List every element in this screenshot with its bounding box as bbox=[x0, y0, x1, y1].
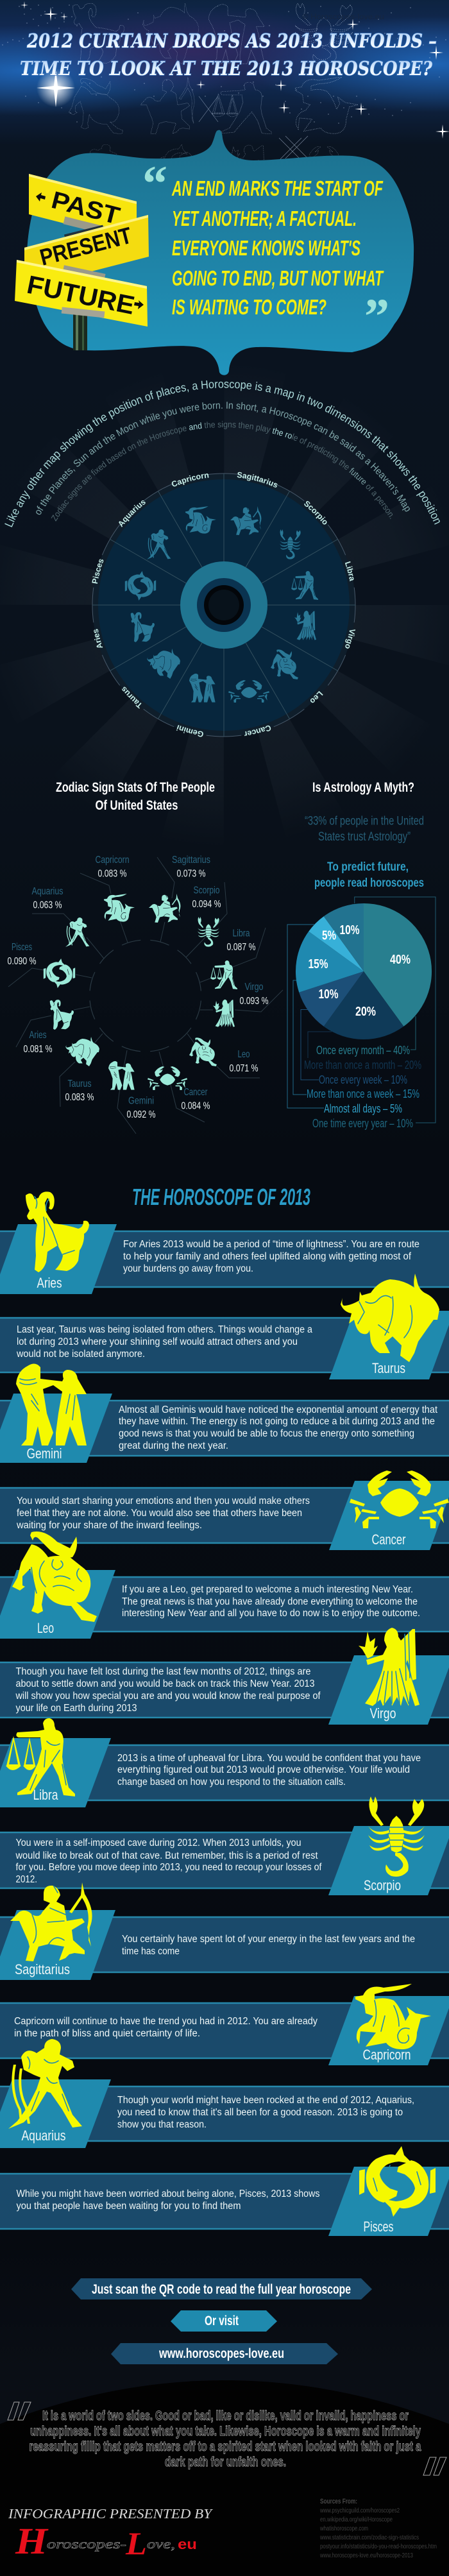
pie labels: 40% bbox=[390, 953, 411, 967]
stats labels: Gemini bbox=[128, 1096, 154, 1106]
stats labels bbox=[8, 855, 268, 1120]
icon: cancer bbox=[350, 1471, 449, 1528]
wheel sign labels: Virgo bbox=[345, 629, 355, 649]
banner: scan QR code bbox=[71, 2278, 372, 2299]
connector lines bbox=[287, 897, 436, 1123]
text: aries bbox=[123, 1239, 419, 1274]
pie labels bbox=[308, 923, 411, 1019]
text: virgo: about to settle down and you would be back on track this New Year. 2013 bbox=[15, 1678, 314, 1689]
heading: zodiac sign stats: Zodiac Sign Stats Of The People bbox=[56, 780, 215, 795]
text: virgo: your life on Earth during 2013 bbox=[15, 1703, 137, 1714]
panel: sagittarius bbox=[0, 1882, 449, 1980]
label: aries: Aries bbox=[37, 1275, 62, 1291]
panel: aquarius bbox=[0, 2039, 449, 2148]
wheel sign labels: Gemini bbox=[176, 725, 203, 737]
sources list bbox=[319, 2498, 437, 2559]
credit: infographic presented by: INFOGRAPHIC PRESENTED BY bbox=[8, 2506, 214, 2521]
wheel sign labels: Taurus bbox=[122, 687, 141, 709]
chart: pie bbox=[287, 897, 436, 1123]
banner: scan QR code: Just scan the QR code to read the full year horoscope bbox=[92, 2282, 351, 2297]
text: aries: your burdens go away from you. bbox=[123, 1263, 253, 1274]
text: libra bbox=[117, 1753, 421, 1787]
text: gemini: they have within. The energy is not going to reduce a bit during 2013 and the bbox=[119, 1416, 435, 1427]
text: aquarius: Though your world might have been rocked at the end of 2012, Aquarius, bbox=[117, 2095, 414, 2106]
label: pisces: Pisces bbox=[363, 2219, 394, 2235]
stats labels: 0.087 % bbox=[227, 942, 255, 953]
stats labels: Aries bbox=[30, 1030, 46, 1041]
text: scorpio: would like to break out of that cave. But remember, this is a period of rest bbox=[15, 1850, 318, 1861]
background rays around wheel bbox=[102, 483, 346, 727]
stats labels: 0.063 % bbox=[33, 900, 62, 911]
text: virgo: will show you how special you are and you would know the real purpose of bbox=[15, 1691, 321, 1702]
panel: scorpio bbox=[0, 1796, 449, 1895]
text: leo: interesting New Year and all you have to do now is to enjoy the outcome. bbox=[122, 1608, 420, 1619]
stats labels: 0.073 % bbox=[177, 869, 205, 879]
quote: 33 percent bbox=[305, 815, 424, 844]
subheading: to predict future bbox=[314, 860, 424, 890]
pie legend: Almost all days – 5% bbox=[324, 1102, 402, 1115]
text: cancer: waiting for your share of the inward feelings. bbox=[16, 1520, 202, 1531]
stats labels: Taurus bbox=[68, 1079, 91, 1089]
icon: taurus bbox=[341, 1274, 439, 1362]
quote marks: opening: “ bbox=[142, 155, 167, 211]
stats labels: Sagittarius bbox=[172, 855, 210, 866]
text: taurus: Last year, Taurus was being isolated from others. Things would change a bbox=[17, 1324, 312, 1335]
label: taurus: Taurus bbox=[372, 1360, 405, 1376]
text: leo bbox=[122, 1584, 420, 1619]
sources list: www.psychicguild.com/horoscopes2 bbox=[319, 2507, 400, 2514]
sources list: en.wikipedia.org/wiki/Horoscope bbox=[320, 2516, 393, 2523]
text: pisces: While you might have been worried about being alone, Pisces, 2013 shows bbox=[17, 2188, 320, 2199]
sources list: www.horoscopes-love.eu/horoscope-2013 bbox=[319, 2552, 413, 2559]
icon: past present future signpost bbox=[15, 174, 149, 350]
quote text bbox=[171, 176, 384, 319]
wheel zodiac icons bbox=[125, 506, 318, 703]
text: libra: everything figured out but 2013 would prove otherwise. Your life would bbox=[117, 1764, 410, 1775]
stats labels: 0.094 % bbox=[192, 899, 221, 910]
banner: website bbox=[111, 2343, 338, 2364]
panel: gemini bbox=[0, 1363, 449, 1463]
wheel sign labels: Leo bbox=[310, 691, 323, 703]
text: aquarius: show you that reason. bbox=[117, 2119, 207, 2130]
stats labels: Scorpio bbox=[194, 885, 220, 896]
text: scorpio: for you. Before you move deep into 2013, you need to recoup your losses of bbox=[15, 1862, 322, 1873]
text: pisces: you that people have been waiting for you to find them bbox=[17, 2201, 241, 2212]
stats labels: 0.071 % bbox=[230, 1063, 258, 1074]
icon: scorpio bbox=[368, 1796, 425, 1877]
stats labels: Capricorn bbox=[95, 855, 130, 866]
text: taurus: lot during 2013 where your shining self would attract others and you bbox=[17, 1336, 298, 1347]
panel: libra bbox=[0, 1718, 449, 1807]
heading: zodiac sign stats bbox=[56, 780, 215, 813]
panel: capricorn bbox=[0, 1984, 449, 2065]
text: capricorn bbox=[14, 2016, 318, 2039]
banner: or visit: Or visit bbox=[205, 2314, 239, 2328]
icon: aquarius bbox=[8, 2039, 82, 2129]
stats labels: Cancer bbox=[183, 1087, 208, 1098]
icon: past present future signpost: FUTURE bbox=[24, 271, 137, 320]
sources list: www.statisticbrain.com/zodiac-sign-statistics bbox=[319, 2534, 419, 2541]
text: scorpio: You were in a self-imposed cave during 2012. When 2013 unfolds, you bbox=[15, 1838, 301, 1848]
pie legend: Once every month – 40% bbox=[316, 1044, 410, 1057]
wheel hub bbox=[180, 561, 267, 649]
text: sagittarius bbox=[122, 1934, 415, 1957]
text: sagittarius: time has come bbox=[122, 1946, 180, 1957]
icon: sagittarius bbox=[10, 1882, 92, 1961]
icon: gemini bbox=[16, 1363, 87, 1446]
heading: is astrology a myth: Is Astrology A Myth? bbox=[312, 780, 414, 795]
text: sagittarius: You certainly have spent lot of your energy in the last few years and the bbox=[122, 1934, 415, 1945]
text: leo: If you are a Leo, get prepared to welcome a much interesting New Year. bbox=[122, 1584, 413, 1595]
label: cancer: Cancer bbox=[372, 1531, 405, 1548]
stats labels: 0.083 % bbox=[97, 869, 127, 879]
curved intro paragraph: of the Planets, Sun and the Moon while you were born. In short, a Horoscope can be said as a Heaven's Map bbox=[36, 402, 410, 515]
constellation figures bbox=[69, 3, 358, 183]
panel: leo bbox=[0, 1531, 449, 1639]
panel: cancer bbox=[0, 1471, 449, 1550]
quote marks: closing: ” bbox=[364, 288, 389, 344]
stats labels: 0.090 % bbox=[8, 956, 36, 967]
icon: pisces bbox=[359, 2146, 436, 2217]
text: aries: to help your family and others feel uplifted along with getting most of bbox=[123, 1251, 412, 1262]
text: taurus bbox=[16, 1324, 312, 1360]
panel: virgo bbox=[0, 1628, 449, 1725]
stats labels: 0.093 % bbox=[240, 996, 268, 1007]
heading: the horoscope of 2013: THE HOROSCOPE OF 2013 bbox=[132, 1184, 310, 1210]
quote: 33 percent: States trust Astrology” bbox=[318, 830, 411, 844]
stats labels: 0.092 % bbox=[127, 1109, 155, 1120]
pie labels: 15% bbox=[308, 957, 328, 971]
curved intro paragraph: Zodiac signs are fixed based on the Horoscope and the signs then play the role of predicting the future of a person. bbox=[51, 421, 393, 521]
pie legend: Once every week – 10% bbox=[319, 1073, 407, 1086]
stats labels: 0.081 % bbox=[23, 1044, 53, 1055]
closing quote marks close bbox=[423, 2457, 446, 2475]
wheel sign labels: Scorpio bbox=[304, 500, 327, 525]
header: starry sky with constellations bbox=[0, 0, 449, 183]
leader lines bbox=[8, 857, 283, 1134]
wheel sign labels: Capricorn bbox=[172, 473, 209, 486]
stats labels: Pisces bbox=[12, 942, 32, 953]
logo: horoscopes-love.eu: oroscopes- bbox=[47, 2538, 126, 2552]
text: pisces bbox=[17, 2188, 320, 2212]
stats labels: Leo bbox=[237, 1049, 250, 1060]
panel: pisces bbox=[0, 2146, 449, 2236]
icon: capricorn bbox=[355, 1984, 431, 2049]
label: capricorn: Capricorn bbox=[363, 2047, 411, 2063]
text: cancer bbox=[16, 1496, 310, 1531]
banner: website: www.horoscopes-love.eu bbox=[158, 2346, 284, 2361]
text: aquarius bbox=[117, 2095, 414, 2130]
text: scorpio bbox=[15, 1838, 322, 1885]
wheel sign labels: Aries bbox=[94, 629, 103, 648]
label: aquarius: Aquarius bbox=[22, 2128, 65, 2144]
label: sagittarius: Sagittarius bbox=[15, 1961, 70, 1977]
footer black dome bbox=[0, 2380, 449, 2576]
subheading: to predict future: To predict future, bbox=[327, 860, 409, 874]
text: gemini bbox=[119, 1404, 438, 1451]
closing quote marks open bbox=[8, 2402, 31, 2420]
text: cancer: feel that they are not alone. You would also see that others have been bbox=[17, 1508, 302, 1519]
stats labels: Virgo bbox=[245, 982, 264, 993]
icon: libra bbox=[6, 1718, 75, 1796]
text: virgo bbox=[15, 1666, 321, 1714]
pie legend: One time every year – 10% bbox=[312, 1117, 413, 1130]
icon: past present future signpost: PRESENT bbox=[37, 222, 134, 271]
sources list: Sources From: bbox=[320, 2498, 357, 2505]
stats labels: 0.084 % bbox=[181, 1101, 210, 1111]
logo: horoscopes-love.eu: L bbox=[125, 2525, 147, 2561]
text: virgo: Though you have felt lost during the last few months of 2012, things are bbox=[15, 1666, 310, 1677]
icon: past present future signpost: PAST bbox=[49, 187, 123, 230]
zodiac wheel bbox=[92, 472, 355, 737]
pie labels: 5% bbox=[322, 929, 336, 943]
wheel sign labels: Aquarius bbox=[119, 500, 146, 527]
text: taurus: would not be isolated anymore. bbox=[16, 1349, 145, 1360]
panel: taurus bbox=[0, 1274, 449, 1379]
label: leo: Leo bbox=[37, 1620, 54, 1636]
text: cancer: You would start sharing your emotions and then you would make others bbox=[17, 1496, 310, 1506]
banner: or visit bbox=[171, 2310, 277, 2332]
sources list: whatishoroscope.com bbox=[319, 2525, 368, 2532]
icon: aries bbox=[26, 1191, 89, 1272]
heading: zodiac sign stats: Of United States bbox=[95, 798, 178, 813]
label: virgo: Virgo bbox=[369, 1705, 396, 1721]
text: aries: For Aries 2013 would be a period of “time of lightness”. You are en route bbox=[123, 1239, 419, 1250]
logo: horoscopes-love.eu: eu bbox=[178, 2536, 197, 2552]
icon: virgo bbox=[359, 1628, 419, 1706]
wheel sign labels bbox=[92, 472, 355, 737]
text: libra: change based on how you respond to the situation calls. bbox=[117, 1777, 346, 1787]
pie labels: 10% bbox=[340, 923, 360, 937]
logo: horoscopes-love.eu: ove, bbox=[147, 2538, 175, 2552]
text: scorpio: 2012. bbox=[15, 1874, 37, 1885]
stats labels: Libra bbox=[232, 928, 250, 939]
logo: horoscopes-love.eu bbox=[15, 2520, 197, 2562]
pie labels: 10% bbox=[318, 987, 339, 1002]
label: gemini: Gemini bbox=[27, 1446, 62, 1462]
panel: teal quote blob bbox=[27, 130, 414, 375]
stats labels: 0.083 % bbox=[65, 1092, 94, 1103]
pie legend bbox=[304, 1044, 421, 1130]
quote text: IS WAITING TO COME? bbox=[172, 295, 326, 319]
text: capricorn: in the path of bliss and quiet certainty of life. bbox=[14, 2028, 200, 2039]
pie labels: 20% bbox=[355, 1005, 376, 1019]
label: scorpio: Scorpio bbox=[364, 1877, 401, 1893]
text: leo: The great news is that you have already done everything to welcome the bbox=[122, 1596, 418, 1607]
logo: horoscopes-love.eu: H bbox=[15, 2520, 49, 2562]
stats labels: Aquarius bbox=[32, 886, 63, 897]
closing quote text bbox=[30, 2409, 421, 2469]
text: gemini: great during the next year. bbox=[119, 1440, 228, 1451]
chart: zodiac sign stats radial bbox=[8, 855, 283, 1134]
title bbox=[20, 30, 437, 80]
wheel sign labels: Cancer bbox=[244, 725, 271, 737]
curved intro paragraph: Like any other map showing the position of places, a Horoscope is a map in two dimensions that shows the position bbox=[4, 380, 440, 527]
wheel sign labels: Libra bbox=[345, 561, 354, 581]
text: gemini: Almost all Geminis would have noticed the exponential amount of energy that bbox=[119, 1404, 438, 1415]
text: libra: 2013 is a time of upheaval for Libra. You would be confident that you have bbox=[117, 1753, 421, 1764]
wheel sign labels: Pisces bbox=[92, 559, 104, 584]
text: aquarius: you need to know that it's all been for a good reason. 2013 is going to bbox=[117, 2107, 403, 2118]
watermark: © Horoscopes-love.eu bbox=[302, 12, 384, 21]
closing quote text: dark path for unfaith ones. bbox=[165, 2455, 286, 2469]
label: libra: Libra bbox=[33, 1787, 58, 1803]
panel: aries bbox=[0, 1191, 449, 1294]
wheel sign labels: Sagittarius bbox=[237, 472, 277, 488]
text: gemini: good news is that you would be able to focus the energy onto something bbox=[119, 1428, 414, 1439]
text: capricorn: Capricorn will continue to have the trend you had in 2012. You are already bbox=[14, 2016, 318, 2027]
icon: leo bbox=[12, 1531, 97, 1622]
stats icons bbox=[44, 894, 237, 1090]
